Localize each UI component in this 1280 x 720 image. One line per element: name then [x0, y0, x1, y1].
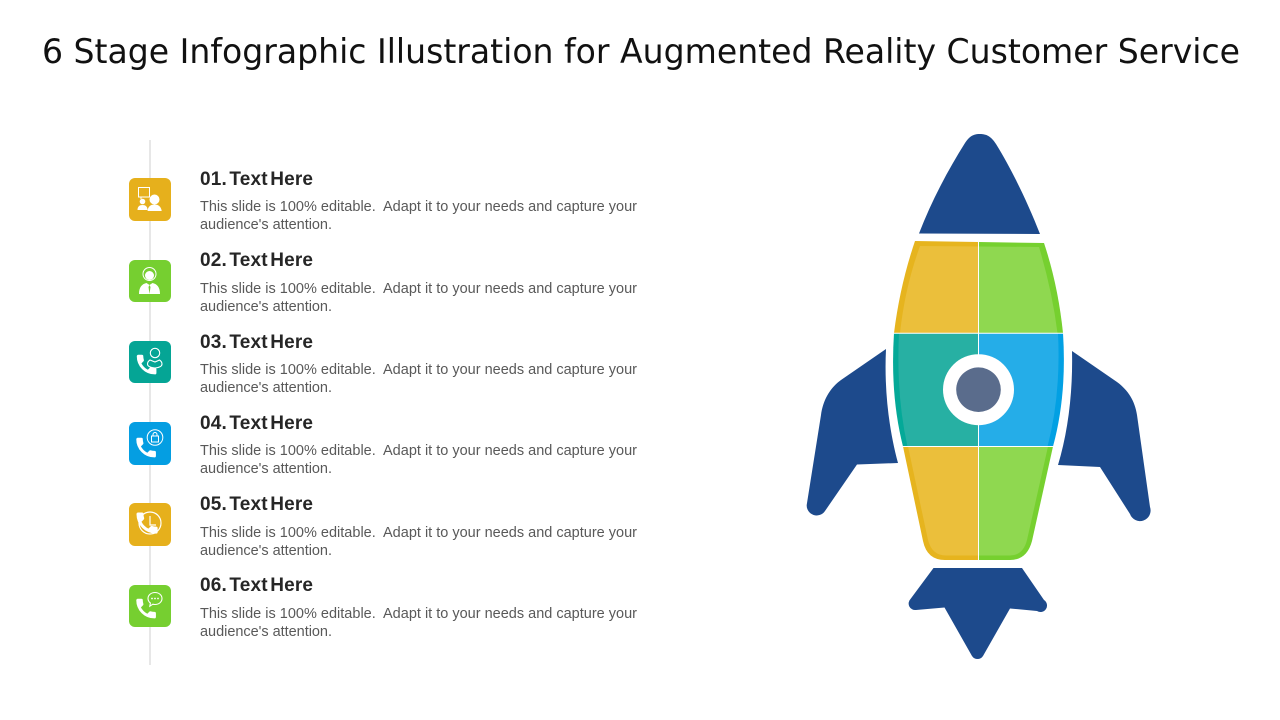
- title: 6 Stage Infographic Illustration for Augmented Reality Customer Service: [42, 32, 1240, 72]
- rocket nose cone: [919, 134, 1040, 234]
- stage 2: [129, 250, 637, 315]
- icon: phone with person: [129, 341, 171, 383]
- description 05: audience's attention.: [200, 543, 332, 559]
- heading 02: 02. Text Here: [200, 250, 313, 271]
- description 03: audience's attention.: [200, 380, 332, 396]
- icon: phone with clock: [129, 503, 171, 546]
- body panel: top left yellow: [894, 241, 978, 333]
- exhaust flame: [909, 568, 1047, 659]
- description 05: [200, 525, 637, 559]
- rocket illustration: [807, 134, 1151, 659]
- icon: people with speech bubble: [129, 178, 171, 221]
- porthole centre: [956, 367, 1001, 412]
- description 02: This slide is 100% editable. Adapt it to your needs and capture your: [200, 281, 637, 297]
- description 01: This slide is 100% editable. Adapt it to your needs and capture your: [200, 199, 637, 215]
- icon: customer service agent: [129, 260, 171, 302]
- description 02: audience's attention.: [200, 299, 332, 315]
- description 06: This slide is 100% editable. Adapt it to your needs and capture your: [200, 606, 637, 622]
- description 06: audience's attention.: [200, 624, 332, 640]
- body panel: bottom left yellow: [903, 446, 978, 560]
- left wing: [807, 349, 898, 515]
- description 05: This slide is 100% editable. Adapt it to your needs and capture your: [200, 525, 637, 541]
- heading 06: 06. Text Here: [200, 575, 313, 596]
- description 01: [200, 199, 637, 233]
- right wing: [1058, 351, 1151, 521]
- description 02: [200, 281, 637, 315]
- stage 1: [129, 169, 637, 233]
- description 04: This slide is 100% editable. Adapt it to your needs and capture your: [200, 443, 637, 459]
- stage 4: [129, 413, 637, 477]
- description 03: This slide is 100% editable. Adapt it to your needs and capture your: [200, 362, 637, 378]
- description 03: [200, 362, 637, 396]
- heading 01: 01. Text Here: [200, 169, 313, 190]
- body panel: middle right blue: [978, 333, 1064, 446]
- description 04: [200, 443, 637, 477]
- icon: phone with chat bubble: [129, 585, 171, 627]
- heading 05: 05. Text Here: [200, 494, 313, 515]
- body panel: middle left teal: [893, 333, 978, 446]
- heading 03: 03. Text Here: [200, 332, 313, 353]
- heading 04: 04. Text Here: [200, 413, 313, 434]
- porthole ring: [943, 354, 1014, 425]
- stage 5: [129, 494, 637, 559]
- body panel: bottom right green: [978, 446, 1053, 560]
- stage 3: [129, 332, 637, 396]
- description 01: audience's attention.: [200, 217, 332, 233]
- stage 6: [129, 575, 637, 640]
- body panel: top right green: [978, 242, 1063, 333]
- description 06: [200, 606, 637, 640]
- icon: phone with shopping bag: [129, 422, 171, 465]
- description 04: audience's attention.: [200, 461, 332, 477]
